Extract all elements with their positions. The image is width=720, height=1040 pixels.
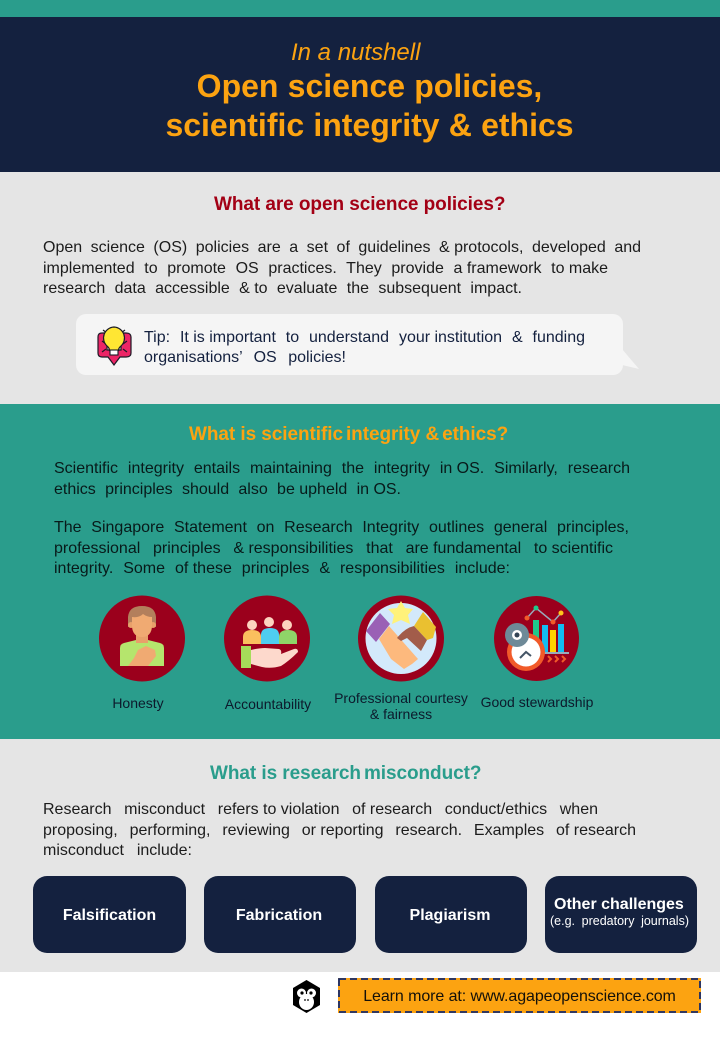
- link banner: [338, 978, 701, 1013]
- callout: tip: Tip: It is important to understand your institution & funding: [144, 329, 585, 346]
- box: other challenges: Other challenges: [554, 896, 684, 913]
- label: honesty: Honesty: [112, 695, 164, 711]
- box: plagiarism: [375, 876, 527, 953]
- text: Singapore Statement: [54, 519, 629, 577]
- label: good stewardship: Good stewardship: [481, 694, 593, 710]
- heading: research misconduct: What is researchmisconduct?: [210, 763, 481, 784]
- icon: accountability: [224, 596, 310, 682]
- link banner: Learn more at: www.agapeopenscience.com: [363, 988, 676, 1005]
- box: other challenges: [545, 876, 697, 953]
- icon: handshake: [358, 596, 444, 682]
- kicker: In a nutshell: [291, 39, 420, 66]
- text: definition: Open science (OS) policies are a set of guidelines & protocols, developed and: [43, 239, 641, 256]
- icon: monkey logo: [293, 980, 320, 1013]
- box: fabrication: [204, 876, 356, 953]
- text: integrity definition: [54, 460, 630, 498]
- icon: stewardship: [494, 596, 579, 681]
- label: accountability: Accountability: [225, 696, 311, 712]
- header panel: [0, 17, 720, 172]
- text: Singapore Statement: The Singapore Statement on Research Integrity outlines general principles,: [54, 519, 629, 536]
- heading: open science policies: What are open science policies?: [214, 194, 505, 215]
- text: Singapore Statement: integrity. Some of these principles & responsibilities include:: [54, 560, 510, 577]
- label: professional courtesy: Professional courtesy: [334, 690, 468, 706]
- text: integrity definition: Scientific integrity entails maintaining the integrity in OS. Similarly, research: [54, 460, 630, 477]
- heading: scientific integrity: What is scientificintegrity &ethics?: [189, 424, 508, 445]
- box: falsification: Falsification: [63, 907, 156, 924]
- text: definition: research data accessible & to evaluate the subsequent impact.: [43, 280, 522, 297]
- callout: tip: organisations’ OS policies!: [144, 349, 346, 366]
- box: falsification: [33, 876, 186, 953]
- text: integrity definition: ethics principles should also be upheld in OS.: [54, 481, 401, 498]
- callout: tip: [76, 314, 638, 375]
- text: misconduct definition: Research misconduct refers to violation of research conduct/ethics when: [43, 801, 598, 818]
- text: misconduct definition: proposing, performing, reviewing or reporting research. Examples of research: [43, 822, 636, 839]
- text: misconduct definition: [43, 801, 636, 859]
- text: Singapore Statement: professional principles & responsibilities that are fundamental to scientific: [54, 540, 613, 557]
- box: fabrication: Fabrication: [236, 907, 322, 924]
- box: plagiarism: Plagiarism: [410, 907, 490, 924]
- top teal band: [0, 0, 720, 17]
- panel: open science policies: [0, 172, 720, 404]
- title: scientific integrity & ethics: [165, 107, 574, 143]
- label: professional courtesy: [334, 690, 468, 722]
- panel: research misconduct: [0, 739, 720, 972]
- title: [165, 68, 574, 143]
- icon: honesty: [99, 596, 185, 682]
- text: definition: [43, 239, 641, 297]
- panel: scientific integrity: [0, 404, 720, 739]
- label: professional courtesy: & fairness: [370, 706, 432, 722]
- title: Open science policies,: [197, 68, 542, 104]
- box: other challenges: (e.g. predatory journals): [550, 914, 689, 928]
- text: definition: implemented to promote OS practices. They provide a framework to make: [43, 260, 608, 277]
- icon: light bulb: [97, 326, 132, 366]
- text: misconduct definition: misconduct include:: [43, 842, 192, 859]
